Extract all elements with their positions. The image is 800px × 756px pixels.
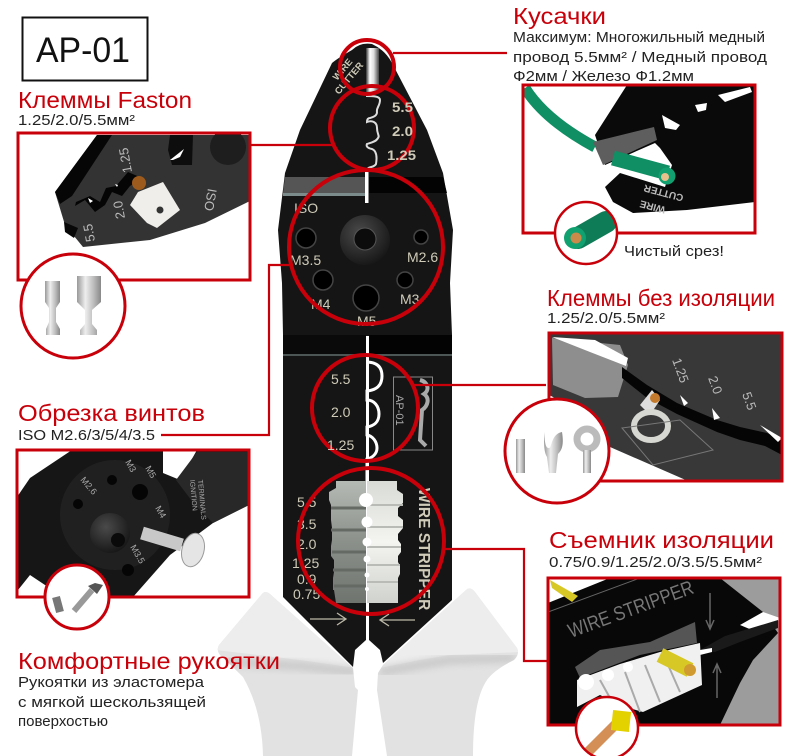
panel: screw photo: TERMINALS bbox=[196, 480, 207, 520]
crimp labels lower bbox=[327, 371, 354, 453]
connector lines bbox=[161, 53, 548, 661]
panel: stripper photo bbox=[548, 577, 780, 725]
panel: screw photo: M5 bbox=[143, 464, 158, 480]
text: cutter specs: Максимум: Многожильный медный bbox=[513, 30, 765, 46]
heading: cutter: Кусачки bbox=[513, 3, 606, 29]
bolt cutter holes: M4 bbox=[311, 296, 331, 312]
stripper gauge labels bbox=[292, 494, 320, 602]
panel: screw photo: M4 bbox=[153, 504, 168, 520]
text: handles description: с мягкой шескользящей bbox=[18, 695, 206, 711]
crimp labels: 2.0 bbox=[392, 123, 413, 139]
text: cutter specs: провод 5.5мм² / Медный провод bbox=[513, 50, 767, 66]
stripper gauge labels: 0.9 bbox=[297, 571, 317, 587]
model label box: AP-01 bbox=[36, 31, 130, 70]
panel: cutter photo: WIRE bbox=[638, 197, 667, 215]
text: non-insulated sizes: 1.25/2.0/5.5мм² bbox=[547, 311, 665, 327]
panel: faston photo bbox=[18, 129, 250, 280]
text: stripper sizes: 0.75/0.9/1.25/2.0/3.5/5.5мм² bbox=[549, 555, 762, 571]
wire stripper teeth bbox=[329, 481, 403, 641]
panel: non-insulated photo: 1.25 bbox=[669, 356, 692, 385]
caption: clean cut: Чистый срез! bbox=[624, 244, 724, 260]
panel: screw photo bbox=[17, 450, 249, 597]
stripper gauge labels: 2.0 bbox=[297, 536, 317, 552]
callout circles on tool bbox=[289, 40, 444, 614]
bolt cutter holes: M5 bbox=[357, 313, 377, 329]
model label box bbox=[22, 18, 148, 80]
inset: non-insulated terminals bbox=[505, 399, 609, 503]
bolt cutter holes bbox=[290, 200, 438, 329]
crimp labels bbox=[387, 99, 416, 163]
bolt cutter holes: M2.6 bbox=[407, 249, 438, 265]
panel: screw photo: M2.6 bbox=[78, 475, 99, 497]
inset: faston terminals bbox=[21, 254, 125, 358]
panel: non-insulated photo: 2.0 bbox=[705, 374, 725, 396]
crimp labels lower: 1.25 bbox=[327, 437, 354, 453]
heading: screw cutting: Обрезка винтов bbox=[18, 400, 205, 426]
direction arrows bbox=[310, 613, 415, 626]
inset: screw pieces bbox=[45, 565, 109, 629]
panel: cutter photo bbox=[523, 85, 755, 233]
crimp labels lower: 2.0 bbox=[331, 404, 351, 420]
bolt cutter holes: M3 bbox=[400, 291, 420, 307]
crimp notches bbox=[366, 96, 380, 170]
panel: non-insulated photo bbox=[549, 333, 782, 481]
model plate: AP-01 bbox=[393, 395, 405, 426]
text: cutter specs: Ф2мм / Железо Ф1.2мм bbox=[513, 69, 694, 85]
stripper gauge labels: 5.5 bbox=[297, 494, 317, 510]
heading: faston: Клеммы Faston bbox=[18, 87, 192, 113]
wire cutter blade bbox=[366, 48, 379, 92]
wire stripper label: WIRE STRIPPER bbox=[415, 488, 432, 610]
panel: faston photo: 5.5 bbox=[80, 223, 98, 243]
heading: wire stripper: Съемник изоляции bbox=[549, 527, 774, 553]
text: handles description bbox=[18, 675, 206, 730]
text: handles description: Рукоятки из эластомера bbox=[18, 675, 205, 691]
insulated crimp notches bbox=[366, 362, 382, 482]
panel: screw photo: M3.5 bbox=[128, 543, 147, 565]
text: screw sizes: ISO M2.6/3/5/4/3.5 bbox=[18, 428, 155, 444]
inset: stripped wire bbox=[576, 697, 638, 756]
heading: comfortable handles: Комфортные рукоятки bbox=[18, 648, 280, 674]
crimp labels lower: 5.5 bbox=[331, 371, 351, 387]
panel: faston photo: 2.0 bbox=[110, 200, 128, 220]
heading: non-insulated terminals: Клеммы без изоляции bbox=[547, 285, 775, 311]
tool illustration bbox=[210, 44, 525, 756]
panel: stripper photo: WIRE STRIPPER bbox=[565, 577, 697, 643]
panel: cutter photo: CUTTER bbox=[642, 181, 685, 203]
text: handles description: поверхостью bbox=[18, 714, 108, 730]
model plate bbox=[393, 377, 432, 450]
tool body bbox=[278, 44, 453, 667]
left handle bbox=[218, 592, 358, 756]
text: faston sizes: 1.25/2.0/5.5мм² bbox=[18, 113, 135, 129]
right handle bbox=[375, 585, 525, 756]
panel: non-insulated photo: 5.5 bbox=[739, 390, 759, 412]
bolt cutter holes: ISO bbox=[294, 200, 318, 216]
text: cutter specs bbox=[513, 30, 767, 85]
inset: clean cut wire bbox=[555, 202, 617, 264]
panel: screw photo: M3 bbox=[123, 458, 138, 474]
stripper gauge labels: 3.5 bbox=[297, 516, 317, 532]
stripper gauge labels: 0.75 bbox=[293, 586, 320, 602]
panel: faston photo: 1.25 bbox=[116, 147, 135, 174]
crimp labels: 5.5 bbox=[392, 99, 413, 115]
crimp labels: 1.25 bbox=[387, 147, 416, 163]
wire cutter label: CUTTER bbox=[333, 60, 366, 97]
panel: screw photo: IGNITION bbox=[188, 480, 198, 511]
bolt cutter holes: M3.5 bbox=[290, 252, 321, 268]
stripper gauge labels: 1.25 bbox=[292, 555, 319, 571]
shaded bands bbox=[283, 177, 452, 356]
wire cutter label top: WIRE bbox=[331, 57, 355, 83]
panel: faston photo: ISO bbox=[201, 187, 220, 212]
